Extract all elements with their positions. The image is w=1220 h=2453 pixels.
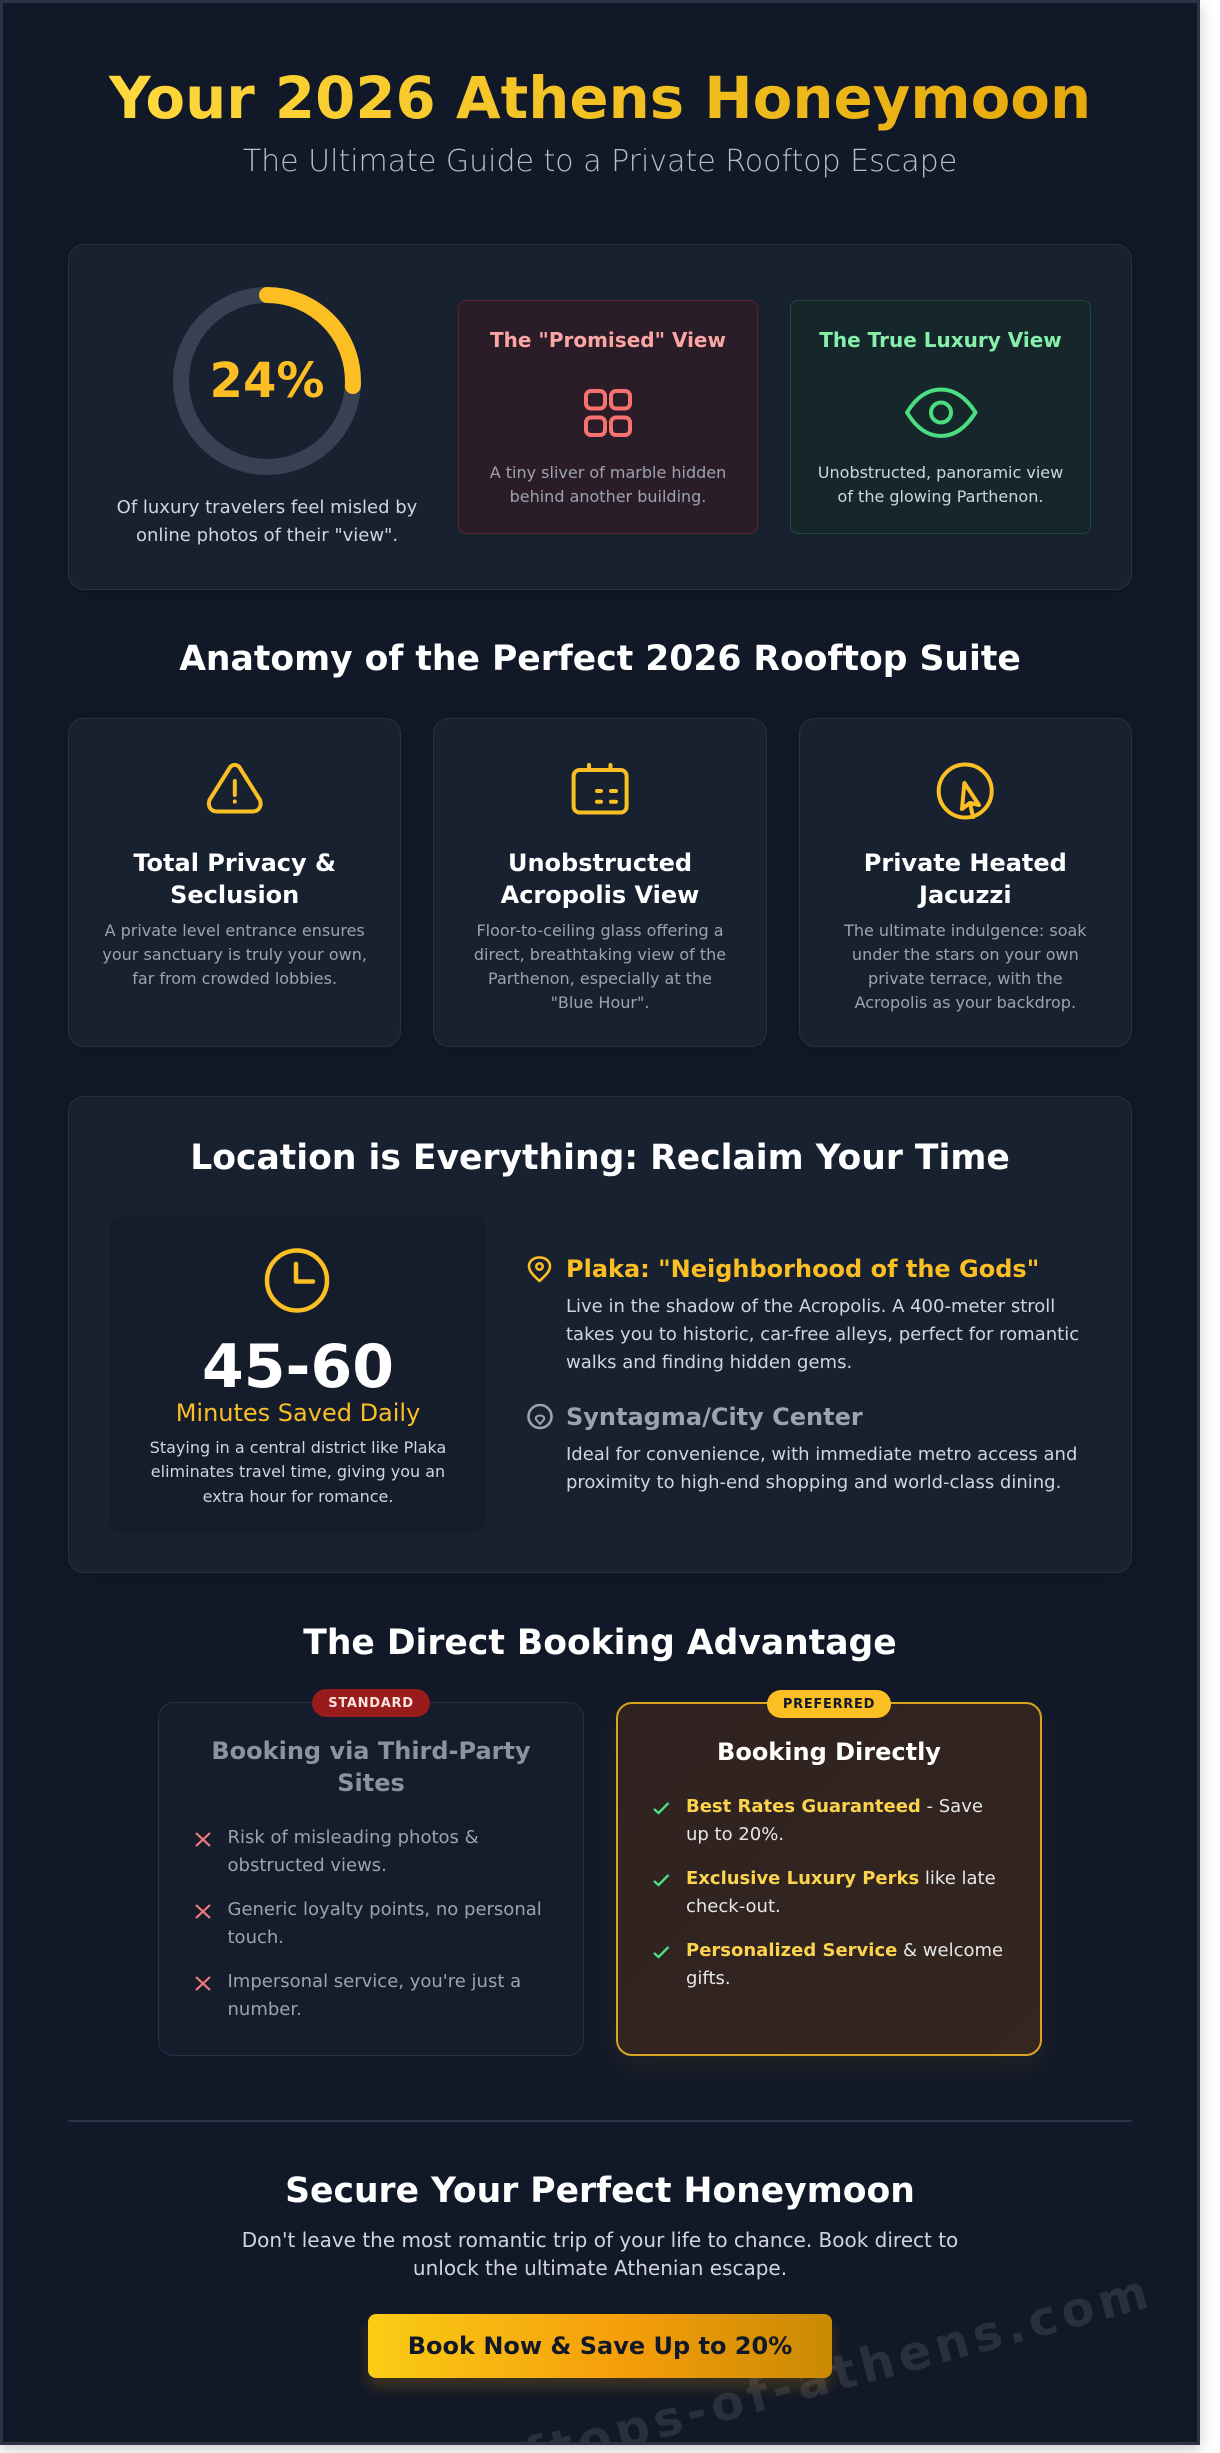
card title: Total Privacy & [133,849,336,877]
heading: Location is Everything: Reclaim Your Time [190,1138,1010,1178]
card: privacy [68,718,401,1047]
item 1 [195,1698,1042,2050]
card title: Booking Directly [717,1738,941,1766]
panel: location [68,1096,1132,1573]
icon: cross [195,1976,211,1991]
donut chart: 24 percent [173,287,361,475]
statistic caption [117,497,417,546]
button: book now: Book Now & Save Up to 20% [408,2332,792,2360]
icon: cross [195,1832,211,1847]
heading: The "Promised" View [490,328,726,352]
badge: preferred [767,1690,891,1718]
card text: Floor-to-ceiling glass offering a [476,921,724,940]
item 2 [195,1698,1042,2050]
call to action text [0,2226,1200,2282]
card text: under the stars on your own [852,945,1079,964]
description [818,463,1063,506]
subtitle: The Ultimate Guide to a Private Rooftop Escape [243,144,957,179]
item text [228,1899,542,1948]
item text [228,1827,479,1876]
card text [102,921,367,988]
icon: calendar [572,763,629,814]
item text: Best Rates Guaranteed - Save [686,1796,983,1817]
card text: A private level entrance ensures [105,921,365,940]
plaka text: Live in the shadow of the Acropolis. A 400-meter stroll [566,1296,1055,1317]
icon: pin [528,1256,552,1282]
icon: check [653,1874,670,1887]
time text: extra hour for romance. [203,1487,393,1506]
card: jacuzzi [799,718,1132,1047]
item 3 [653,1936,1033,1993]
time label: Minutes Saved Daily [176,1399,420,1427]
card title: Unobstructed [508,849,692,877]
icon: warning [206,762,263,814]
card title [500,849,699,909]
icon: circle cursor [936,762,994,820]
card title: Private Heated [864,849,1067,877]
card text [474,921,726,1012]
card: direct booking [616,1702,1042,2056]
heading: direct booking: The Direct Booking Advantage [303,1623,897,1663]
badge: standard: STANDARD [328,1696,414,1711]
card: third-party booking [158,1702,584,2056]
time text [150,1438,446,1506]
plaka text: takes you to historic, car-free alleys, perfect for romantic [566,1324,1079,1345]
item text: up to 20%. [686,1824,784,1845]
item text: gifts. [686,1968,731,1989]
description: Unobstructed, panoramic view [818,463,1063,482]
plaka text: walks and finding hidden gems. [566,1352,852,1373]
icon: check [653,1802,670,1815]
plaka heading: Plaka: "Neighborhood of the Gods" [566,1255,1039,1283]
item 2 [653,1868,996,1917]
card title: Sites [337,1769,405,1797]
icon: clock [264,1248,330,1313]
item text [228,1971,521,2020]
heading: call to action: Secure Your Perfect Honeymoon [285,2171,915,2211]
plaka text [566,1296,1079,1373]
syntagma text: Ideal for convenience, with immediate metro access and [566,1444,1077,1465]
description: A tiny sliver of marble hidden [490,463,726,482]
time text: Staying in a central district like Plaka [150,1438,446,1457]
time value: 45-60 [202,1332,394,1402]
badge: preferred: PREFERRED [783,1697,875,1712]
time text: eliminates travel time, giving you an [151,1462,445,1481]
card title: Acropolis View [501,881,699,909]
description: behind another building. [510,487,706,506]
icon: check [0,144,15,156]
card text: direct, breathtaking view of the [474,945,726,964]
statistic value: 24% [210,353,324,409]
heading: The True Luxury View [819,328,1062,352]
description [490,463,726,506]
item text [686,1868,996,1917]
card text: Acropolis as your backdrop. [855,993,1076,1012]
icon: grid [584,389,632,437]
statistic caption: Of luxury travelers feel misled by [117,497,417,518]
item text: Risk of misleading photos & [228,1827,479,1848]
card text: private terrace, with the [868,969,1063,988]
list: direct booking benefits [653,1796,1003,1989]
icon: eye [905,388,978,438]
panel: misleading view statistic [68,244,1132,590]
card text: The ultimate indulgence: soak [844,921,1087,940]
item text [686,1796,983,1845]
call to action text: unlock the ultimate Athenian escape. [413,2256,787,2280]
item 3 [195,1698,1042,2050]
card title: Seclusion [170,881,299,909]
syntagma text: proximity to high-end shopping and world-class dining. [566,1472,1061,1493]
card title [864,849,1067,909]
item 1 [653,1796,983,1845]
item text: obstructed views. [228,1855,387,1876]
list: third-party drawbacks [195,1698,1042,2050]
card text: your sanctuary is truly your own, [102,945,367,964]
card: view [433,718,767,1047]
card text [844,921,1087,1012]
title: Your 2026 Athens Honeymoon [109,64,1091,132]
icon: cross [195,1904,211,1919]
button: book now [368,2314,832,2378]
item text: Generic loyalty points, no personal [228,1899,542,1920]
badge: standard [312,1689,430,1717]
card title [133,849,336,909]
item text: check-out. [686,1896,781,1917]
panel: promised view [458,300,758,534]
item text: Exclusive Luxury Perks like late [686,1868,996,1889]
icon: city center [527,1404,553,1430]
card title: Jacuzzi [919,881,1012,909]
card title [211,1737,531,1797]
syntagma text [566,1444,1077,1493]
item text: Impersonal service, you're just a [228,1971,521,1992]
item text: number. [228,1999,302,2020]
description: of the glowing Parthenon. [838,487,1043,506]
call to action text: Don't leave the most romantic trip of your life to chance. Book direct to [242,2228,958,2252]
card text: Parthenon, especially at the [488,969,712,988]
item text: touch. [228,1927,284,1948]
card text: far from crowded lobbies. [132,969,337,988]
heading: anatomy: Anatomy of the Perfect 2026 Rooftop Suite [179,639,1021,679]
panel: time saved [110,1217,486,1533]
panel: true luxury view [790,300,1091,534]
statistic caption: online photos of their "view". [136,525,398,546]
item text [686,1937,1003,1993]
item text: Personalized Service & welcome [686,1940,1003,1961]
card text: "Blue Hour". [551,993,649,1012]
card title: Booking via Third-Party [211,1737,531,1765]
syntagma heading: Syntagma/City Center [566,1403,863,1431]
